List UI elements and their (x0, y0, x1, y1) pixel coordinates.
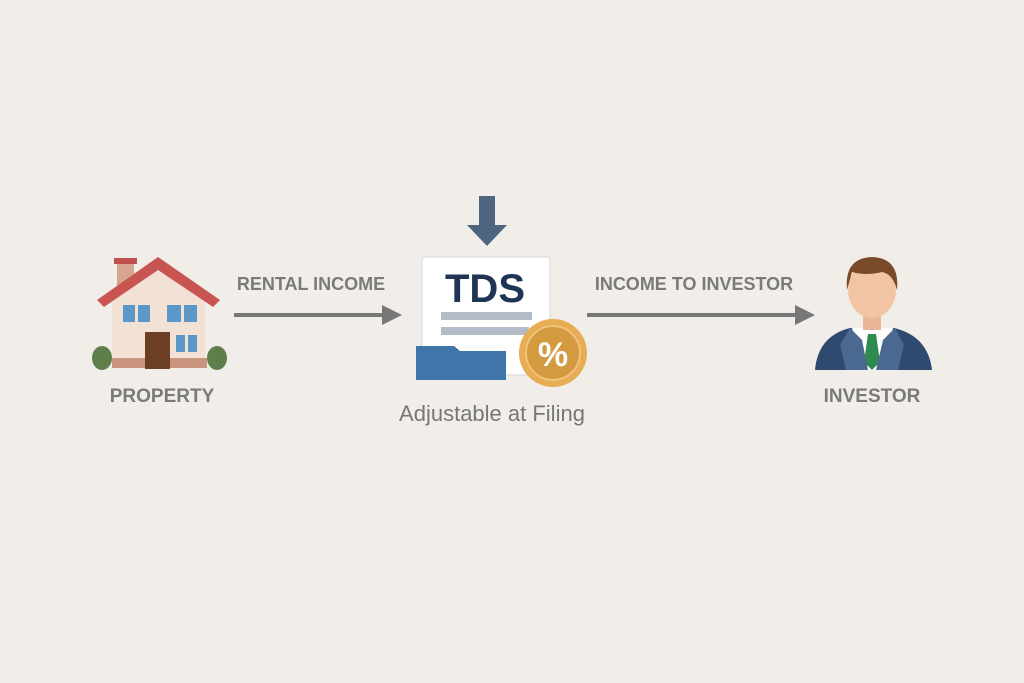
caption: adjustable at filing: Adjustable at Filing (399, 401, 585, 426)
icon: TDS document: % (538, 336, 568, 374)
label: income to investor: INCOME TO INVESTOR (595, 274, 793, 294)
icon: TDS document (416, 257, 587, 387)
label: rental income: RENTAL INCOME (237, 274, 385, 294)
arrow: TDS to investor (587, 305, 815, 325)
icon: house (92, 257, 227, 370)
icon: TDS document: TDS (445, 267, 525, 311)
label: property: PROPERTY (110, 386, 215, 407)
arrow: property to TDS (234, 305, 402, 325)
label: investor: INVESTOR (824, 386, 921, 407)
icon: investor (815, 257, 932, 370)
arrow: down into TDS (467, 196, 507, 246)
